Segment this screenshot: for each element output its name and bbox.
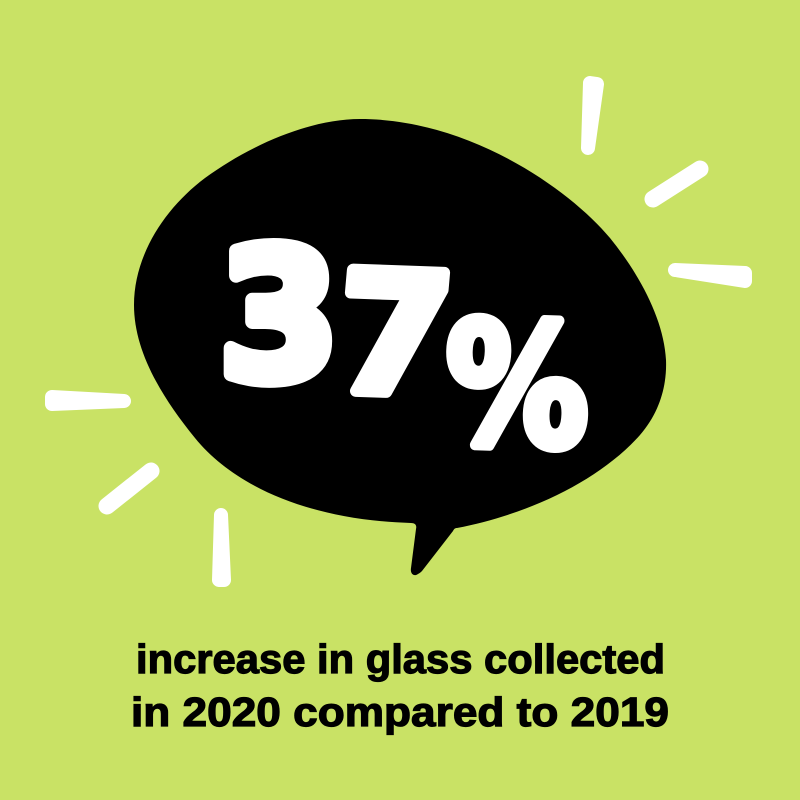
caption line 2: in 2020 compared to 2019 (131, 689, 669, 735)
caption line 1: increase in glass collected (136, 636, 665, 682)
rays: top right (588, 83, 745, 281)
digit 3: 3 (219, 213, 339, 421)
percent sign: % (442, 286, 593, 486)
digit 7: 7 (328, 237, 460, 434)
speech bubble (134, 119, 666, 575)
big number: 37% (219, 213, 593, 486)
caption (131, 636, 669, 735)
rays: bottom left (52, 397, 224, 580)
